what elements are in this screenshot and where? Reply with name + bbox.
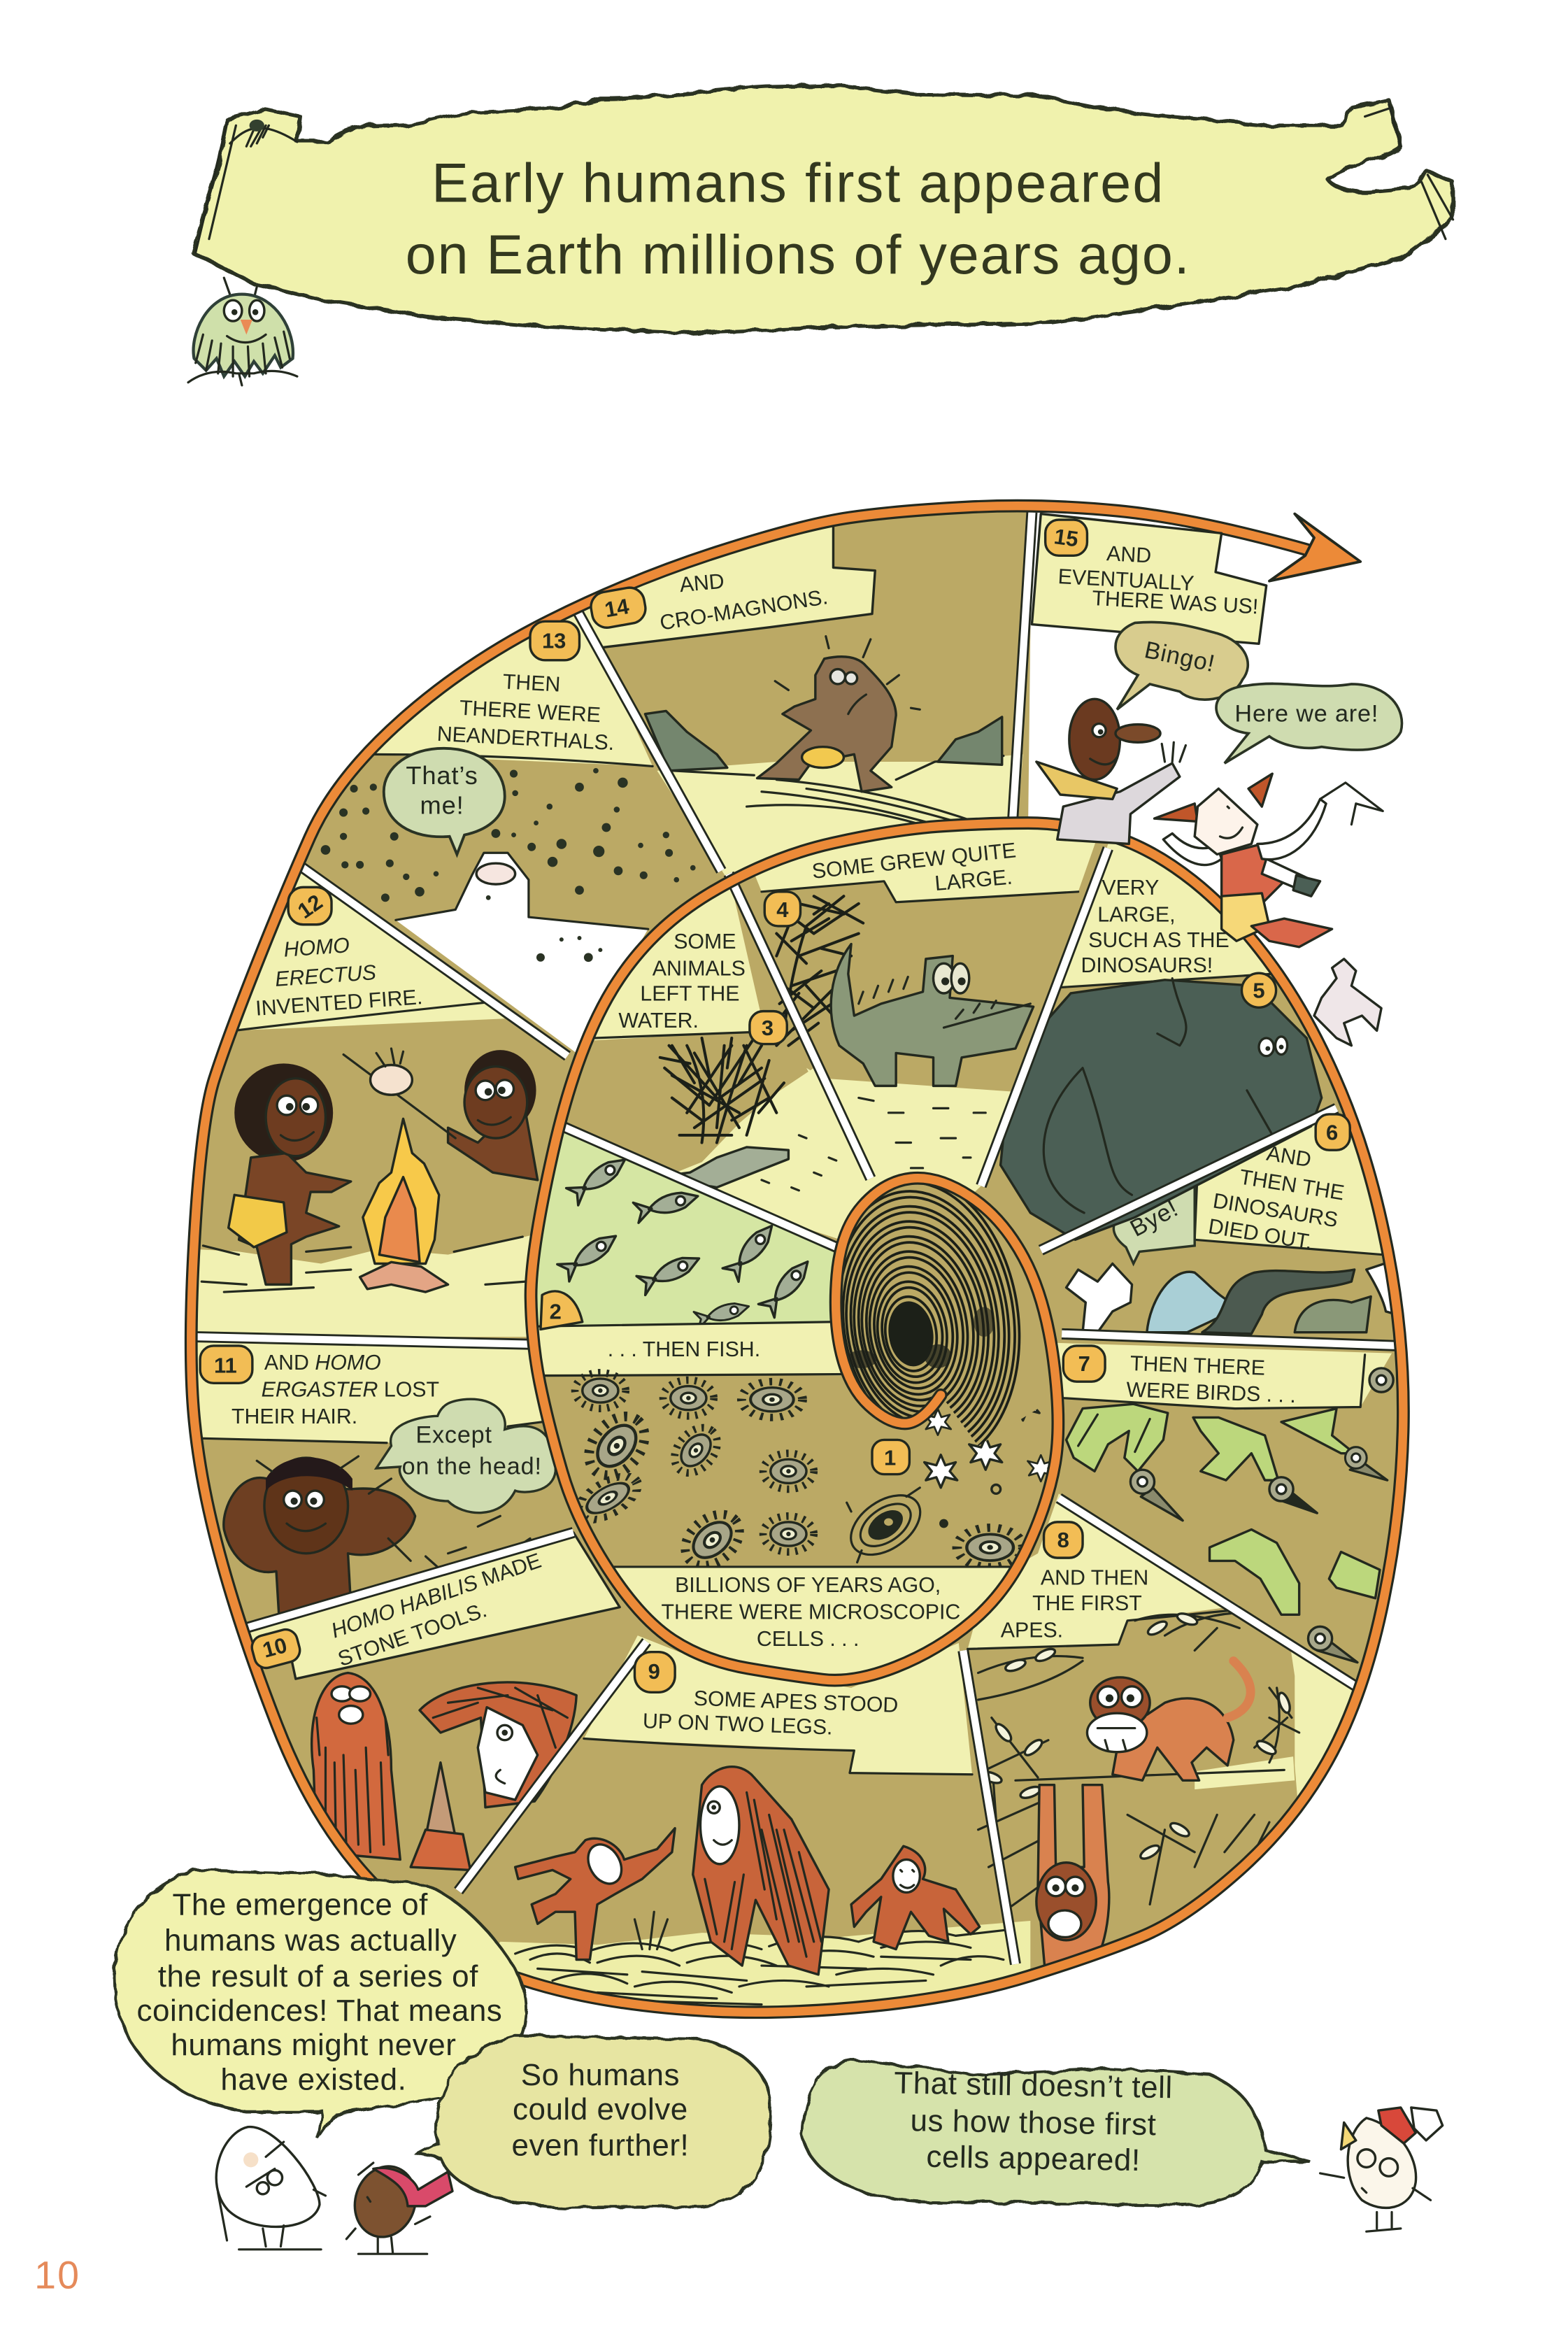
caption 1: CELLS . . . — [757, 1628, 859, 1651]
speech bubble: how first cells appeared: us how those first — [910, 2103, 1157, 2142]
panel 12: Homo erectus and fire scene — [187, 859, 541, 1337]
panel 8: first apes scene — [968, 1493, 1367, 1975]
figure: woman waving — [1155, 774, 1383, 947]
figure: small ape right — [851, 1846, 980, 1949]
icon: campfire — [360, 1118, 448, 1292]
icon: bare tree — [771, 896, 863, 1046]
caption 2 — [541, 1291, 760, 1361]
caption 5: DINOSAURS! — [1081, 954, 1213, 977]
panel 15: modern humans scene — [1032, 514, 1402, 1046]
caption 9 — [634, 1652, 899, 1740]
icon: bush — [660, 1038, 784, 1143]
caption 8: AND THEN — [1041, 1567, 1148, 1590]
caption 4 — [764, 839, 1017, 926]
inner spiral panels — [508, 807, 1135, 1703]
speech bubble: emergence of humans: the result of a series of — [158, 1959, 478, 1994]
figure: monkey on branch — [1087, 1661, 1250, 1780]
panel 3: animals leave the water scene — [583, 874, 874, 1240]
speech bubble: emergence of humans: coincidences! That means — [137, 1994, 502, 2028]
caption 9: 9 — [648, 1659, 660, 1684]
speech bubble: humans could evolve: could evolve — [513, 2092, 688, 2126]
caption panel 15 — [1032, 514, 1267, 644]
caption 12: 12 — [293, 890, 327, 923]
caption 15: THERE WAS US! — [1092, 587, 1259, 618]
caption 3: ANIMALS — [653, 957, 746, 980]
caption 1: 1 — [884, 1446, 896, 1470]
figure: man in shirt and tie — [1036, 699, 1185, 844]
caption 10: STONE TOOLS. — [335, 1598, 490, 1671]
speech bubble: emergence of humans: humans might never — [171, 2028, 456, 2062]
caption 12: ERECTUS — [274, 961, 377, 991]
panel 9: apes standing upright scene — [448, 1635, 1030, 2009]
icon: fuzzy green creature holding the banner — [188, 278, 297, 385]
caption 8: APES. — [1001, 1619, 1063, 1642]
speech bubble: Bye! — [1113, 1179, 1195, 1263]
panel 2: fish scene — [515, 1117, 854, 1376]
caption 12: INVENTED FIRE. — [255, 986, 423, 1021]
panel 11: Homo ergaster loses hair scene — [187, 1340, 555, 1621]
dividers between panels — [197, 512, 1398, 1964]
caption 15: 15 — [1053, 524, 1080, 552]
figure: extinct dinosaurs — [1067, 1262, 1396, 1334]
caption 6: AND — [1265, 1142, 1313, 1172]
leaves — [981, 1612, 1292, 1861]
speech bubble: That's me! — [384, 748, 505, 854]
spiral timeline base — [191, 505, 1403, 2012]
icon: brown potato character with pink cap — [345, 2159, 452, 2254]
icon: cream character with red hat — [1320, 2108, 1443, 2231]
caption 12 — [255, 887, 423, 1021]
speech bubble: Here we are!: Here we are! — [1234, 700, 1378, 727]
speech bubble: how first cells appeared: cells appeared! — [926, 2140, 1141, 2178]
speech bubble: emergence of humans — [114, 1870, 526, 2139]
panel 6: dinosaurs die out scene — [1067, 1113, 1404, 1334]
icon: galaxy — [840, 1483, 931, 1567]
caption 13: 13 — [542, 629, 566, 653]
icon: flying green birds — [1067, 1368, 1393, 1663]
panel 13: Neanderthals scene — [321, 597, 696, 1053]
speech bubble: Except on the head! — [376, 1399, 555, 1513]
caption 7: THEN THERE — [1129, 1352, 1265, 1380]
caption 3 — [618, 930, 787, 1044]
speech bubble: Except on the head!: Except — [415, 1422, 492, 1449]
figure: hairless man — [224, 1456, 530, 1621]
caption 8: 8 — [1057, 1528, 1069, 1552]
icon: white egg character with glasses — [216, 2127, 325, 2250]
caption 6: 6 — [1326, 1120, 1338, 1144]
speech bubble: humans could evolve: even further! — [511, 2128, 689, 2162]
caption 5: VERY — [1102, 876, 1159, 900]
caption 7: 7 — [1078, 1351, 1090, 1376]
caption 11 — [200, 1346, 439, 1428]
caption 4: LARGE. — [934, 866, 1013, 895]
captions and number badges — [200, 520, 1350, 1740]
speech bubble: Except on the head!: on the head! — [402, 1454, 542, 1480]
caption 13 — [436, 621, 615, 755]
speech bubble: Here we are! — [1216, 683, 1402, 763]
figure: small ape left — [515, 1828, 675, 1960]
speech bubble: Bye!: Bye! — [1126, 1195, 1183, 1242]
speech bubble: humans could evolve — [418, 2036, 771, 2208]
caption 13: THERE WERE — [459, 697, 601, 727]
panel 4: large reptile scene — [739, 807, 1108, 1195]
caption 15: AND — [1106, 542, 1152, 568]
figure: ape hanging from branch — [1036, 1785, 1109, 1975]
caption 1 — [662, 1440, 960, 1651]
caption 5: 5 — [1253, 978, 1265, 1002]
caption 11: ERGASTER LOST — [262, 1379, 439, 1402]
caption 6 — [1206, 1114, 1350, 1254]
figure: ape-man with stone tool — [411, 1682, 576, 1870]
figure: crocodile — [831, 944, 1034, 1086]
figure: large ape walking upright — [693, 1767, 829, 1975]
caption 9: UP ON TWO LEGS. — [642, 1710, 833, 1740]
figure: mouse — [1314, 959, 1381, 1046]
caption 7 — [1063, 1346, 1296, 1407]
page number: 10 — [34, 2253, 80, 2296]
caption 15: EVENTUALLY — [1057, 565, 1195, 595]
figure: ape-man standing — [312, 1673, 400, 1859]
caption 14: CRO-MAGNONS. — [658, 585, 829, 635]
panel 10: Homo habilis tools scene — [231, 1533, 620, 1870]
center spiral origin — [805, 1163, 1053, 1477]
caption 10: 10 — [260, 1633, 290, 1663]
panel 14: Cro-Magnons scene — [576, 508, 1023, 881]
caption 5: LARGE, — [1097, 903, 1176, 926]
speech bubble: That's me!: me! — [420, 791, 464, 820]
panel 1: microscopic cells scene — [571, 1372, 1054, 1688]
caption 6: DIED OUT. — [1206, 1215, 1314, 1254]
caption 14 — [589, 570, 829, 635]
caption 14: 14 — [603, 594, 632, 622]
caption 2: 2 — [550, 1299, 562, 1323]
figure: right cave dweller with stick — [343, 1049, 538, 1180]
caption 6: THEN THE — [1238, 1165, 1346, 1205]
speech bubble: Bingo!: Bingo! — [1142, 637, 1218, 677]
panel 7: birds scene — [1053, 1343, 1393, 1663]
caption 3: WATER. — [618, 1009, 699, 1032]
caption 10: HOMO HABILIS MADE — [329, 1549, 544, 1643]
caption 10 — [249, 1549, 544, 1671]
speech bubble: emergence of humans: have existed. — [220, 2062, 406, 2096]
caption 3: SOME — [673, 930, 736, 953]
orange spiral arrow — [191, 506, 1403, 2012]
figure: dark green dinosaur — [1001, 979, 1322, 1240]
figure: caveman thinking — [757, 637, 920, 792]
caption 11: AND HOMO — [264, 1351, 381, 1375]
caption 9: SOME APES STOOD — [693, 1687, 899, 1717]
caption 4: SOME GREW QUITE — [811, 839, 1017, 883]
figure: amphibian leaving water — [657, 1147, 788, 1188]
title text: Early humans first appeared — [432, 151, 1163, 213]
panel 5: dinosaur scene — [1001, 837, 1322, 1240]
caption 13: THEN — [502, 670, 561, 697]
figure: left cave dweller — [229, 1063, 351, 1284]
caption 3: 3 — [762, 1016, 774, 1040]
caption 11: THEIR HAIR. — [231, 1405, 357, 1428]
speech bubble: how first cells appeared — [802, 2060, 1310, 2205]
caption 12: HOMO — [283, 934, 350, 962]
pebble dots — [321, 768, 696, 962]
caption 3: LEFT THE — [640, 983, 740, 1006]
speech bubble: Bingo! — [1116, 622, 1248, 709]
caption 13: NEANDERTHALS. — [436, 723, 615, 755]
caption 6: DINOSAURS — [1211, 1189, 1339, 1232]
speech bubble: That's me!: That’s — [406, 761, 478, 790]
caption 7: WERE BIRDS . . . — [1126, 1379, 1296, 1407]
title text — [406, 151, 1190, 285]
caption 8 — [1001, 1522, 1148, 1642]
caption 5: SUCH AS THE — [1088, 929, 1230, 952]
title text: on Earth millions of years ago. — [406, 223, 1190, 285]
caption 15 — [1046, 520, 1259, 618]
caption 1: THERE WERE MICROSCOPIC — [662, 1601, 960, 1624]
caption 4: 4 — [776, 897, 789, 922]
caption 1: BILLIONS OF YEARS AGO, — [675, 1574, 941, 1597]
speech bubble: how first cells appeared: That still doesn’t tell — [894, 2066, 1173, 2105]
caption 14: AND — [678, 570, 725, 597]
caption 11: 11 — [214, 1353, 237, 1377]
speech bubble: emergence of humans: The emergence of — [172, 1887, 428, 1922]
caption 5 — [1081, 876, 1276, 1007]
banner scroll shape — [192, 85, 1453, 333]
caption 8: THE FIRST — [1032, 1592, 1142, 1615]
caption 2: . . . THEN FISH. — [608, 1338, 760, 1361]
speech bubble: emergence of humans: humans was actually — [164, 1924, 457, 1958]
speech bubble: humans could evolve: So humans — [521, 2058, 680, 2092]
title banner — [188, 85, 1453, 385]
